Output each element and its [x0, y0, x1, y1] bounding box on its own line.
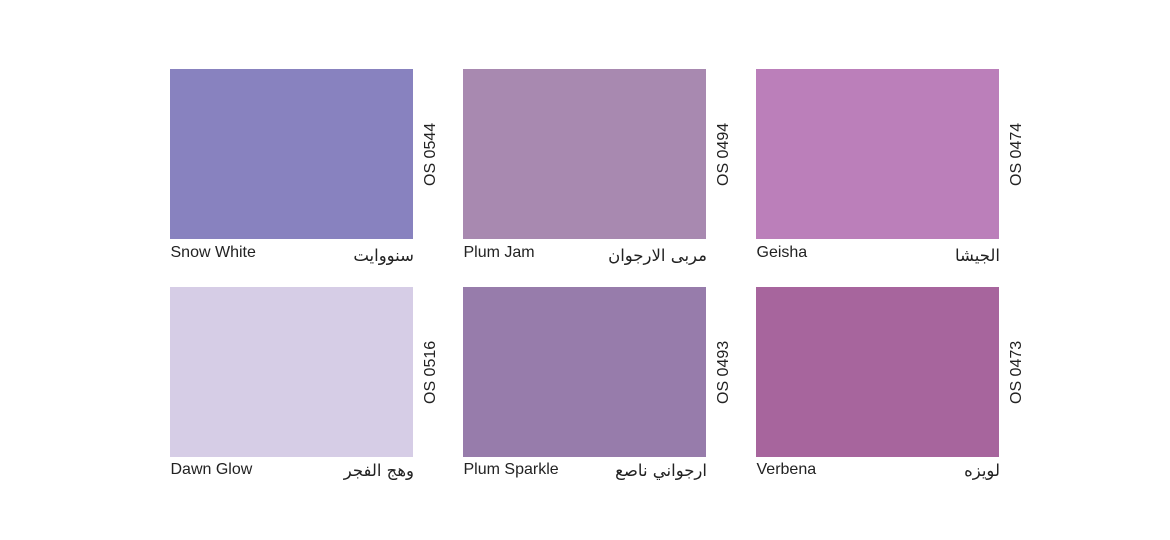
Arabic name: Snow White: سنووايت [353, 246, 414, 265]
swatch card: Plum Jam [463, 69, 732, 265]
English name: Snow White: Snow White [170, 244, 256, 261]
English name: Geisha: Geisha [756, 244, 807, 261]
Arabic name: Plum Sparkle: ارجواني ناصع [615, 461, 707, 480]
English name: Plum Jam: Plum Jam [464, 244, 535, 261]
colour code: OS 0493: OS 0493 [715, 341, 732, 404]
Arabic name: Dawn Glow: وهج الفجر [344, 461, 414, 480]
English name: Dawn Glow: Dawn Glow [170, 461, 252, 478]
Arabic name: Geisha: الجيشا [955, 246, 1000, 265]
colour swatch: Dawn Glow [170, 287, 413, 456]
colour swatch: Plum Sparkle [463, 287, 706, 456]
swatch card: Dawn Glow [170, 287, 439, 480]
swatch card: Snow White [170, 69, 439, 265]
swatch card: Geisha [756, 69, 1025, 265]
colour code: OS 0474: OS 0474 [1008, 123, 1025, 186]
English name: Plum Sparkle: Plum Sparkle [464, 461, 559, 478]
English name: Verbena: Verbena [756, 461, 816, 478]
Arabic name: Verbena: لويزه [964, 461, 1000, 480]
colour swatch: Plum Jam [463, 69, 706, 238]
colour code: OS 0544: OS 0544 [422, 123, 439, 186]
colour code: OS 0473: OS 0473 [1008, 341, 1025, 404]
colour swatch: Geisha [756, 69, 999, 238]
colour code: OS 0516: OS 0516 [422, 341, 439, 404]
colour code: OS 0494: OS 0494 [715, 123, 732, 186]
colour swatch: Verbena [756, 287, 999, 456]
swatch card: Plum Sparkle [463, 287, 732, 480]
colour swatch: Snow White [170, 69, 413, 238]
swatch card: Verbena [756, 287, 1025, 480]
Arabic name: Plum Jam: مربى الارجوان [608, 246, 707, 265]
